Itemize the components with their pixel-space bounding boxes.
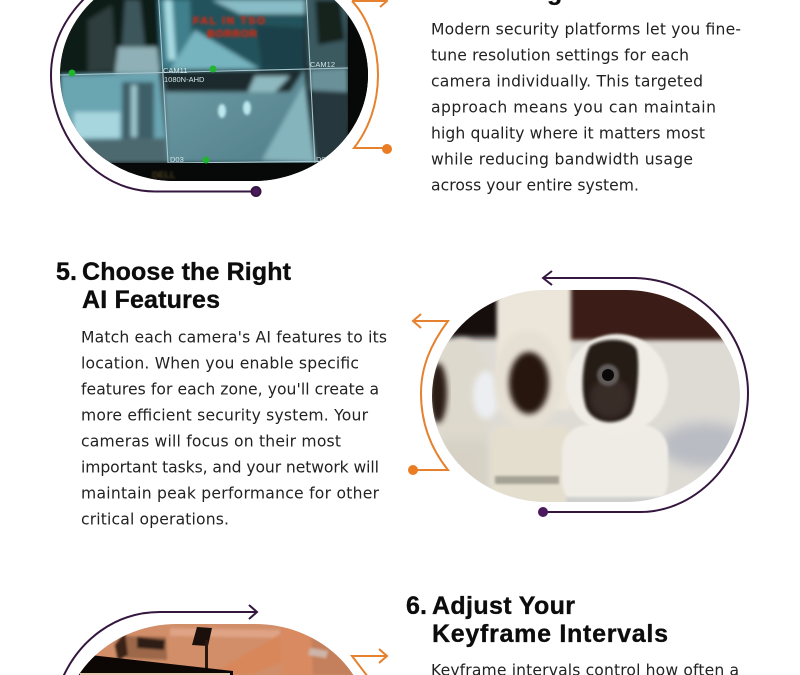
section 5: heading: 5. (56, 258, 77, 286)
section 5: body text: more efficient security system. Your (81, 407, 369, 425)
photo: white dome security cameras (432, 290, 740, 502)
section 4: body text: high quality where it matters most (431, 125, 705, 143)
photo: surveillance monitor grid: FAL IN TSO (193, 15, 265, 27)
section 5: heading: AI Features (82, 286, 220, 314)
orange arc around photo 5 (408, 314, 448, 475)
section 5: body text: maintain peak performance for other (81, 485, 380, 503)
section 5: body text: critical operations. (81, 511, 229, 529)
orange arc around photo 4 (352, 0, 392, 154)
purple arc around photo 4 (51, 0, 260, 196)
photo: surveillance monitor grid: D03 (170, 155, 184, 164)
photo: orange-tinted building camera (78, 624, 354, 675)
photo: surveillance monitor grid: D0 (316, 155, 326, 164)
photo: surveillance monitor grid: BORROR (207, 28, 257, 40)
photo: surveillance monitor grid: 1080N-AHD (164, 75, 205, 84)
section 5: body text: features for each zone, you'll create a (81, 381, 379, 399)
orange arc around photo 6 (352, 649, 387, 675)
section 4: body text (431, 21, 741, 195)
section 4: body text: tune resolution settings for each (431, 47, 689, 65)
section 6: heading: 6. (406, 592, 427, 620)
section 6: heading: Adjust Your (432, 592, 575, 620)
section 4: body text: while reducing bandwidth usage (431, 151, 693, 169)
section 4: body text: across your entire system. (431, 177, 639, 195)
section 6: heading: Keyframe Intervals (432, 620, 668, 648)
section 5: heading (56, 258, 292, 314)
section 4: body text: Modern security platforms let you fine- (431, 21, 741, 39)
photo: surveillance monitor grid: CAM11 (163, 66, 187, 75)
section 5: heading: Choose the Right (82, 258, 292, 286)
photo: surveillance monitor grid: CAM12 (310, 60, 335, 69)
photo: surveillance monitor grid (60, 0, 368, 181)
section 5: body text (81, 329, 387, 529)
section 5: body text: Match each camera's AI features to its (81, 329, 387, 347)
section 5: body text: important tasks, and your network will (81, 459, 379, 477)
section 5: body text: cameras will focus on their most (81, 433, 341, 451)
purple arc around photo 6 (63, 605, 257, 675)
section 4: body text: camera individually. This targeted (431, 73, 703, 91)
section 5: body text: location. When you enable specific (81, 355, 359, 373)
purple arc around photo 5 (538, 271, 748, 517)
section 4: body text: approach means you can maintain (431, 99, 716, 117)
section 6: heading (406, 592, 668, 648)
photo: surveillance monitor grid: DELL (152, 170, 176, 180)
